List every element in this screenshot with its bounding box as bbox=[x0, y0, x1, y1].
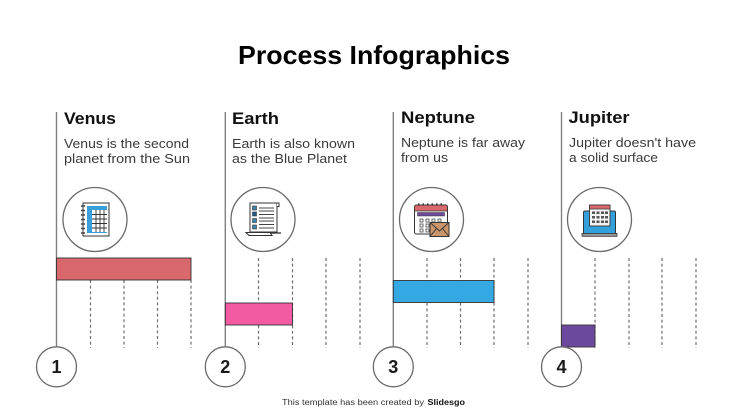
description: Venus: planet from the Sun bbox=[64, 152, 190, 166]
panel: Venus bbox=[36, 110, 191, 387]
description: Jupiter bbox=[569, 136, 696, 165]
footer credit: Slidesgo bbox=[428, 398, 465, 407]
footer credit: This template has been created by bbox=[282, 398, 424, 407]
description: Neptune: from us bbox=[401, 151, 448, 165]
icon: scroll checklist bbox=[231, 188, 295, 252]
title: Process Infographics bbox=[238, 40, 510, 70]
heading: Neptune: Neptune bbox=[401, 109, 475, 127]
description: Venus bbox=[64, 137, 190, 166]
description: Jupiter: a solid surface bbox=[569, 151, 658, 165]
description: Neptune: Neptune is far away bbox=[401, 136, 526, 150]
number badge 4 bbox=[542, 347, 582, 387]
icon: notebook grid bbox=[63, 188, 127, 252]
number badge 3 bbox=[373, 347, 413, 387]
bar: Earth bbox=[225, 303, 292, 325]
footer credit bbox=[282, 398, 465, 407]
bar: Jupiter bbox=[562, 325, 595, 347]
description: Earth bbox=[232, 137, 355, 166]
description: Earth: as the Blue Planet bbox=[232, 152, 348, 166]
number badge 2 bbox=[205, 347, 245, 387]
heading: Jupiter: Jupiter bbox=[568, 109, 630, 127]
number badge 1: 1 bbox=[51, 357, 62, 377]
heading: Venus: Venus bbox=[64, 110, 116, 128]
bar: Venus bbox=[56, 258, 191, 280]
panel: Earth bbox=[205, 110, 360, 387]
description: Venus: Venus is the second bbox=[64, 137, 189, 151]
number badge 4: 4 bbox=[556, 357, 567, 377]
description: Neptune bbox=[401, 136, 526, 165]
panel: Neptune bbox=[373, 109, 528, 387]
panel: Jupiter bbox=[542, 109, 696, 387]
bar: Neptune bbox=[393, 280, 494, 302]
description: Earth: Earth is also known bbox=[232, 137, 355, 151]
icon: calendar with envelope bbox=[400, 188, 464, 252]
heading: Earth: Earth bbox=[232, 110, 279, 128]
icon: laptop with calendar bbox=[568, 188, 632, 252]
number badge 1 bbox=[36, 347, 76, 387]
description: Jupiter: Jupiter doesn't have bbox=[569, 136, 696, 150]
number badge 3: 3 bbox=[388, 357, 398, 377]
number badge 2: 2 bbox=[220, 357, 230, 377]
